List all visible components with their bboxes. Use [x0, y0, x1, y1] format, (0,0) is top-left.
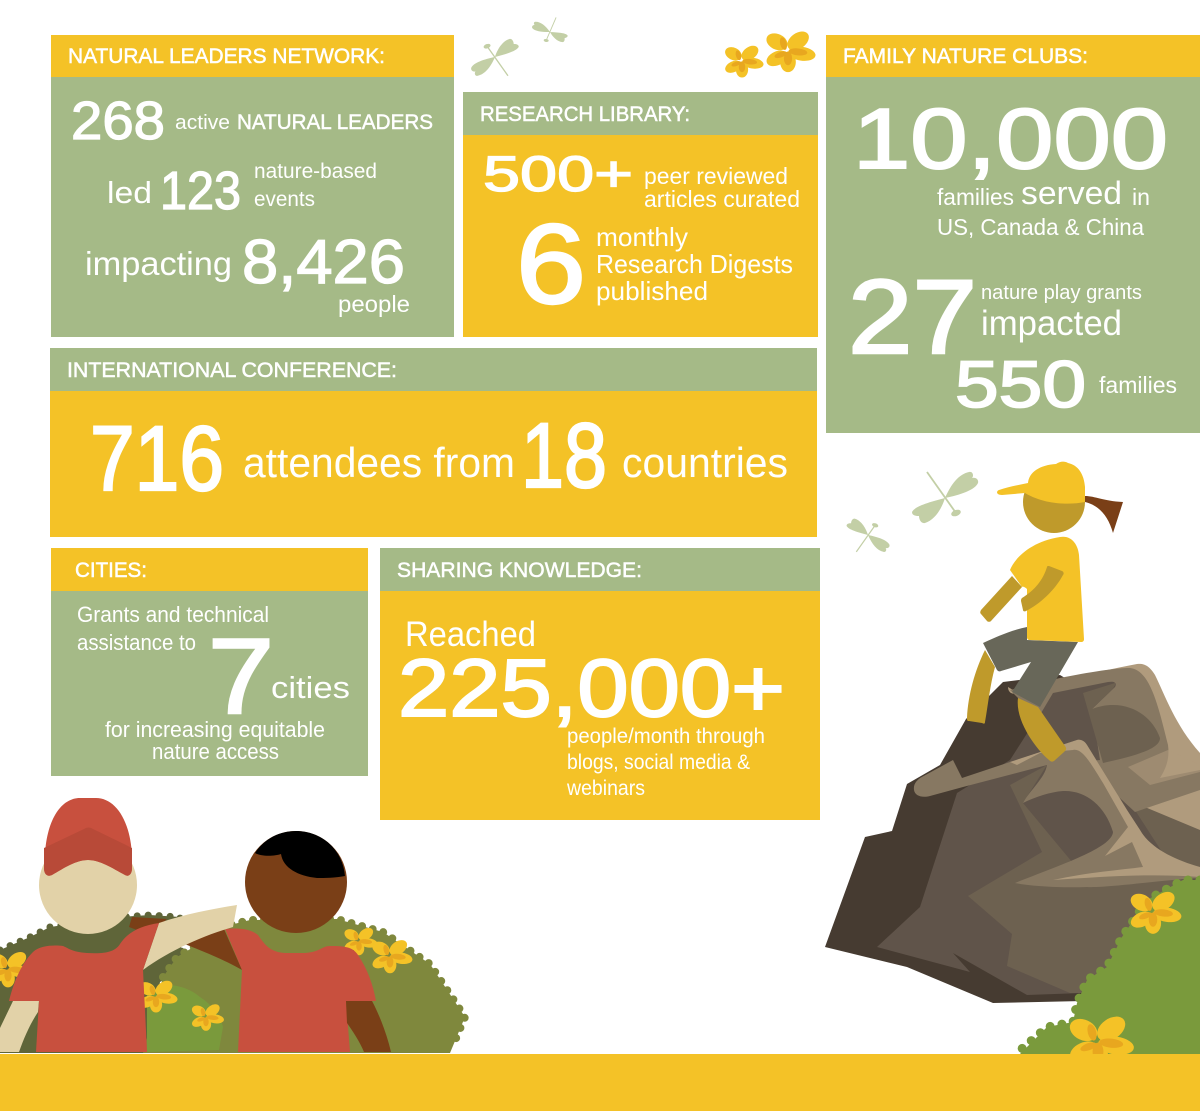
- stat: 225,000+ people per month: Reached: [405, 615, 536, 654]
- cap shade: [44, 828, 132, 876]
- stat: 268 natural leaders: 268: [71, 91, 165, 151]
- stat: 8,426 people: impacting: [85, 245, 232, 282]
- illustration: left person: [0, 798, 237, 1052]
- stat: 7 cities: 7: [208, 616, 274, 736]
- stat: 8,426 people: 8,426: [242, 228, 405, 297]
- stat: 7 cities: for increasing equitable: [105, 717, 325, 742]
- illustration: light green bush: [147, 985, 223, 1052]
- illustration: bush right: [1018, 880, 1200, 1056]
- stat: 268 natural leaders: NATURAL LEADERS: [237, 111, 433, 134]
- icon: dragonflies near girl: [847, 472, 978, 552]
- arm: far: [980, 576, 1022, 622]
- arm: [346, 1001, 391, 1052]
- stat: 225,000+ people per month: webinars: [566, 777, 645, 800]
- stat: 716 attendees from 18 countries: 716: [90, 408, 224, 510]
- stat: 7 cities: cities: [271, 670, 350, 705]
- stat: 716 attendees from 18 countries: 18: [521, 405, 607, 507]
- illustration: girl on rock: [967, 462, 1123, 762]
- stat: 268 natural leaders: [71, 91, 433, 151]
- heading: research library: RESEARCH LIBRARY:: [480, 103, 690, 126]
- icon: flowers on right bush: [1066, 888, 1182, 1070]
- head: [39, 836, 137, 934]
- shorts: [983, 627, 1078, 707]
- icon: top flowers: [723, 28, 816, 78]
- arm: near: [1021, 566, 1064, 611]
- shirt: [1010, 537, 1084, 642]
- illustration: olive bush: [143, 919, 465, 1053]
- stat: 500+ articles: [483, 146, 800, 212]
- stat: 225,000+ people per month: people/month through: [567, 725, 765, 748]
- hair: [255, 831, 345, 878]
- icon: flowers on left bushes: [0, 925, 413, 1031]
- panel: family nature clubs: [826, 35, 1200, 433]
- stat: 550 families: 550: [955, 347, 1086, 421]
- stat: 716 attendees from 18 countries: countries: [622, 439, 788, 486]
- shirt: [9, 923, 159, 1052]
- stat: 500+ articles: articles curated: [644, 186, 800, 212]
- stat: 7 cities: [77, 602, 350, 764]
- shirt: [225, 929, 376, 1052]
- illustration: dark bush: [0, 915, 182, 1053]
- stat: 6 research digests: 6: [516, 201, 586, 327]
- stat: 716 attendees from 18 countries: [90, 405, 788, 510]
- stat: 10,000 families: [853, 92, 1168, 240]
- stat: 10,000 families: served: [1021, 175, 1122, 211]
- stat: 500+ articles: 500+: [483, 146, 633, 202]
- stat: 550 families: families: [1099, 372, 1177, 398]
- stat: 550 families: [955, 347, 1177, 421]
- stat: 6 research digests: monthly: [596, 222, 688, 252]
- stat: 10,000 families: US, Canada & China: [937, 214, 1144, 240]
- cap: [44, 798, 132, 876]
- stat: 123 events: nature-based: [254, 160, 377, 183]
- leg: back: [967, 650, 995, 724]
- stat: 27 nature play grants: 27: [848, 259, 977, 376]
- heading: sharing knowledge: SHARING KNOWLEDGE:: [397, 559, 642, 582]
- stat: 27 nature play grants: [848, 259, 1142, 376]
- illustration: right person: [182, 831, 391, 1052]
- stat: 6 research digests: published: [596, 276, 708, 306]
- panel: international conference: [50, 348, 817, 537]
- stat: 10,000 families: in: [1132, 184, 1150, 210]
- stat: 6 research digests: Research Digests: [596, 249, 793, 279]
- heading: international conference: INTERNATIONAL CONFERENCE:: [67, 359, 397, 382]
- stat: 8,426 people: people: [338, 291, 410, 317]
- panel: cities: [51, 548, 368, 776]
- stat: 225,000+ people per month: blogs, social media &: [567, 751, 750, 774]
- stat: 8,426 people: [85, 228, 410, 317]
- lower boulder: [914, 740, 1200, 887]
- stat: 27 nature play grants: nature play grants: [981, 282, 1142, 304]
- arm around friend: [143, 905, 237, 970]
- leg: front: [1018, 698, 1066, 762]
- heading: cities: CITIES:: [75, 559, 147, 582]
- stat: 123 events: led: [107, 175, 152, 210]
- stat: 7 cities: assistance to: [77, 630, 196, 655]
- panel: sharing knowledge: [380, 548, 820, 820]
- stat: 225,000+ people per month: [398, 615, 785, 800]
- upper boulder: [1008, 664, 1200, 830]
- stat: 10,000 families: families: [937, 184, 1014, 210]
- footer band: [0, 1054, 1200, 1111]
- stat: 123 events: [107, 160, 377, 221]
- head: [245, 831, 347, 933]
- panel: natural leaders network: [51, 35, 454, 337]
- stat: 7 cities: nature access: [152, 739, 279, 764]
- panel: research library: [463, 92, 818, 337]
- stat: 27 nature play grants: impacted: [981, 304, 1122, 343]
- stat: 123 events: events: [254, 188, 315, 211]
- head: [1023, 471, 1085, 533]
- arm down: [0, 1001, 39, 1052]
- cap: [997, 462, 1085, 504]
- heading: family nature clubs: FAMILY NATURE CLUBS:: [843, 45, 1088, 68]
- stat: 6 research digests: [516, 201, 793, 327]
- stat: 7 cities: Grants and technical: [77, 602, 269, 627]
- stat: 123 events: 123: [160, 161, 241, 221]
- stat: 500+ articles: peer reviewed: [644, 163, 788, 189]
- stat: 716 attendees from 18 countries: attendees from: [243, 439, 515, 486]
- heading: natural leaders network: NATURAL LEADERS NETWORK:: [68, 45, 385, 68]
- stat: 268 natural leaders: active: [175, 112, 230, 134]
- ponytail: [1085, 496, 1123, 533]
- stat: 225,000+ people per month: 225,000+: [398, 643, 785, 734]
- illustration: rock: [825, 664, 1200, 1003]
- stat: 10,000 families: 10,000: [853, 92, 1168, 187]
- icon: top dragonflies: [471, 16, 569, 76]
